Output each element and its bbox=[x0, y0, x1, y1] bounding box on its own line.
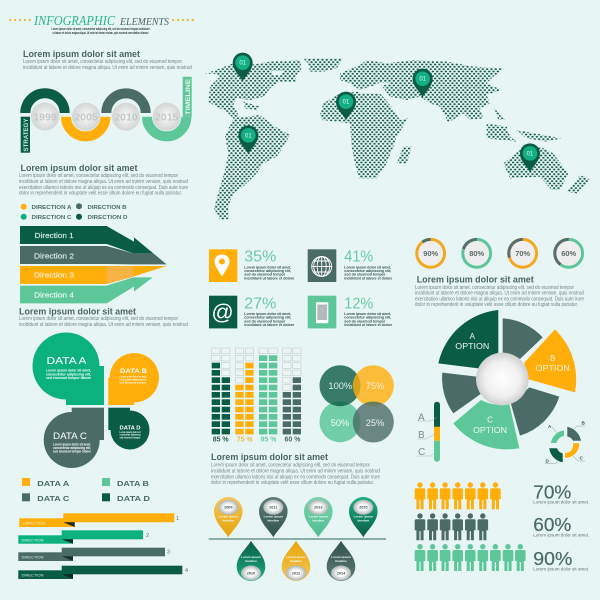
arrow chart: directions: Direction 2 bbox=[34, 251, 74, 260]
petal: data D: Lorem ipsum dolor sit bbox=[120, 431, 141, 434]
pin 2013: timeline bbox=[312, 518, 324, 522]
petal: data D: DATA D bbox=[120, 426, 141, 432]
pin 2015: Lorem ipsum bbox=[354, 514, 373, 518]
title bbox=[9, 14, 195, 35]
chart: mini donut: B bbox=[582, 420, 586, 426]
petal: data C: DATA C bbox=[53, 431, 88, 441]
text block: timeline intro: Lorem ipsum dolor sit amet, consectetur adipiscing elit, sed do eiusmod tempor bbox=[23, 59, 182, 65]
text block: options intro: exercitation ullamco laboris nisi ut aliquip ex ea commodo consequat. Duis aute irure bbox=[415, 296, 584, 302]
pictogram row: 70%: 70% bbox=[533, 481, 571, 502]
pin 2010 bbox=[237, 541, 265, 581]
text block: data intro: Lorem ipsum dolor sit amet, consectetur adipiscing elit, sed do eiusmod tempor bbox=[19, 316, 178, 322]
chart: ribbon bars bbox=[18, 513, 188, 579]
pin 2011 bbox=[259, 497, 288, 537]
chart: year timeline bbox=[21, 77, 192, 153]
ribbon bar 1: DIRECTION bbox=[23, 520, 45, 525]
stat: 35% location bbox=[209, 249, 294, 282]
text block: directions intro: dolor in reprehenderit in voluptate velit esse cillum dolore eu fugiat nulla pariatur. bbox=[19, 191, 182, 197]
petal: data B: sed eiusmod tempor bbox=[120, 380, 146, 384]
text block: timeline intro bbox=[23, 49, 192, 71]
chart: option wheel: OPTION bbox=[536, 364, 570, 373]
chart: year timeline: 2010 bbox=[114, 112, 138, 124]
stat: 27% at sign: consectetur adipiscing elit, bbox=[244, 316, 291, 320]
chart: cell bars bbox=[212, 348, 301, 444]
ribbon bar 4: DIRECTION bbox=[22, 572, 44, 578]
title: INFOGRAPHIC bbox=[33, 14, 116, 29]
text block: timeline intro: incididunt ut labore et dolore magna aliqua. Ut enim ad minim veniam, quis nostrud bbox=[23, 65, 192, 71]
pin 2012: timeline bbox=[290, 559, 302, 563]
ring 90%: 90% bbox=[423, 249, 439, 258]
pin: Africa: 01 bbox=[343, 100, 350, 106]
ribbon bar 3: 3 bbox=[167, 550, 170, 556]
bar group 75%: 75 % bbox=[237, 437, 253, 444]
chart: mini donut bbox=[545, 420, 586, 464]
text block: timeline pins intro: Lorem ipsum dolor sit amet, consectetur adipiscing elit, sed do eiusmod tempor bbox=[211, 463, 370, 469]
text block: timeline intro: Lorem ipsum dolor sit amet bbox=[23, 49, 140, 59]
petal: data C: sed eiusmod tempor labore bbox=[53, 450, 91, 454]
petal: data D: sed eiusmod tempor bbox=[120, 436, 141, 439]
stat: 35% location: Lorem ipsum dolor sit amet, bbox=[244, 265, 291, 269]
map: dotted world map bbox=[205, 53, 591, 220]
stat: 27% at sign: 27% bbox=[244, 295, 276, 312]
chart: A B C scale: C bbox=[418, 447, 425, 458]
petal: data C: Lorem ipsum dolor sit amet, bbox=[53, 442, 91, 446]
chart: venn circles: 50% bbox=[331, 418, 349, 428]
text block: directions intro: incididunt ut labore et dolore magna aliqua. Ut enim ad minim veniam, quis nostrud bbox=[19, 179, 188, 185]
title: ••••• bbox=[172, 18, 195, 24]
pin: Australia bbox=[520, 143, 540, 172]
text block: directions intro bbox=[19, 163, 188, 197]
chart: year timeline: 1999 bbox=[33, 112, 57, 124]
pin 2009: 2009 bbox=[224, 506, 233, 510]
pictogram row: 60%: Lorem ipsum dolor sit amet. bbox=[533, 532, 589, 538]
legend: directions: DIRECTION A bbox=[32, 205, 72, 211]
chart: venn circles: 75% bbox=[366, 381, 384, 391]
pin 2014: 2014 bbox=[337, 571, 346, 575]
ring 60% bbox=[549, 234, 588, 273]
pin: North America: 01 bbox=[239, 61, 247, 67]
chart: mini donut: A bbox=[548, 424, 552, 429]
stat: 12% phone: consectetur adipiscing elit, bbox=[344, 316, 391, 320]
pin: Asia: 01 bbox=[419, 77, 427, 83]
petal: data B: Lorem ipsum dolor sit amet bbox=[120, 374, 147, 378]
petal: data C bbox=[44, 408, 104, 468]
ribbon bar 3: DIRECTION bbox=[22, 554, 44, 560]
stat: 41% globe: consectetur adipiscing elit, bbox=[344, 269, 391, 273]
petal: data A: consectetur adipiscing elit, bbox=[46, 372, 91, 376]
petal: data D bbox=[108, 408, 150, 450]
pin 2011: 2011 bbox=[269, 506, 277, 510]
stat: 35% location: sed do eiusmod tempor bbox=[244, 273, 286, 277]
pin 2010: Lorem ipsum bbox=[241, 555, 261, 559]
legend: directions: DIRECTION D bbox=[88, 215, 128, 221]
arrow chart: directions: Direction 4 bbox=[34, 290, 74, 300]
ring 70%: 70% bbox=[515, 249, 531, 258]
pin 2015 bbox=[349, 497, 378, 537]
bar group 60%: 60 % bbox=[285, 437, 301, 444]
ring 60%: 60% bbox=[561, 249, 577, 258]
stat: 35% location: consectetur adipiscing elit, bbox=[244, 269, 291, 273]
legend: data: DATA A bbox=[37, 479, 70, 488]
title: ut labore et dolore magna aliqua. Ut enim ad minim veniam, quis nostrud exercitation ullamco bbox=[52, 31, 149, 35]
stat: 41% globe bbox=[308, 249, 392, 282]
chart: venn circles: 100% bbox=[328, 381, 352, 391]
pin: North America bbox=[233, 53, 253, 82]
chart: option wheel: B bbox=[550, 354, 555, 363]
text block: options intro: incididunt ut labore et dolore magna aliqua. Ut enim ad minim veniam, quis nostrud bbox=[415, 291, 584, 297]
text block: timeline pins intro: exercitation ullamco laboris nisi ut aliquip ex ea commodo consequat. Duis aute irure bbox=[211, 474, 380, 480]
text block: directions intro: Lorem ipsum dolor sit amet bbox=[20, 163, 138, 173]
text block: timeline pins intro: Lorem ipsum dolor sit amet bbox=[211, 452, 328, 462]
chart: progress rings bbox=[411, 234, 588, 273]
icon: at sign: @ bbox=[211, 300, 234, 324]
arrow chart: directions: Direction 3 bbox=[34, 270, 74, 280]
chart: option wheel: OPTION bbox=[455, 342, 490, 351]
title: Lorem ipsum dolor sit amet, consectetur adipiscing elit, sed do eiusmod tempor incididunt bbox=[52, 27, 150, 31]
ribbon bar 1 bbox=[19, 513, 179, 527]
chart: year timeline: TIMELINE bbox=[186, 79, 192, 115]
pin 2010: 2010 bbox=[247, 571, 255, 575]
petal: data A bbox=[32, 332, 104, 405]
bar group 85%: 85 % bbox=[213, 437, 229, 444]
petal: data B bbox=[108, 353, 159, 405]
stat: 27% at sign: incididunt ut labore et dolore bbox=[244, 323, 294, 327]
title: ••••• bbox=[9, 18, 32, 24]
legend: data bbox=[22, 478, 151, 503]
legend: data: DATA C bbox=[37, 494, 70, 503]
stat: 35% location: incididunt ut labore et dolore bbox=[244, 276, 294, 280]
chart: venn circles bbox=[320, 365, 394, 442]
title: ELEMENTS bbox=[119, 17, 170, 28]
stat: 41% globe: 41% bbox=[344, 249, 373, 266]
text block: data intro bbox=[19, 306, 188, 328]
stat: 12% phone: incididunt ut labore et dolore bbox=[344, 323, 392, 327]
ribbon bar 2 bbox=[18, 530, 149, 544]
ribbon bar 3 bbox=[18, 548, 170, 561]
pictogram row: 90%: Lorem ipsum dolor sit amet. bbox=[533, 566, 589, 571]
pictogram row: 60%: 60% bbox=[533, 514, 571, 535]
ribbon bar 1: 1 bbox=[176, 516, 179, 522]
pictogram row: 90% bbox=[415, 544, 589, 571]
stat: 27% at sign: Lorem ipsum dolor sit amet, bbox=[244, 312, 291, 316]
bar group 95%: 95 % bbox=[261, 437, 277, 444]
legend: directions: DIRECTION C bbox=[32, 215, 72, 221]
legend: directions: DIRECTION B bbox=[88, 205, 126, 211]
stat: 12% phone: sed do eiusmod tempor bbox=[344, 319, 386, 323]
pin: Africa bbox=[336, 92, 356, 121]
pin 2015: timeline bbox=[357, 518, 369, 522]
pin: South America: 01 bbox=[245, 133, 252, 139]
chart: mini donut: C bbox=[580, 456, 584, 460]
pin 2010: timeline bbox=[245, 559, 257, 563]
pin 2013 bbox=[304, 497, 333, 537]
ribbon bar 2: DIRECTION bbox=[22, 537, 44, 542]
pin 2013: Lorem ipsum bbox=[309, 514, 328, 518]
pin 2011: Lorem ipsum bbox=[264, 514, 283, 518]
pin 2014: Lorem ipsum bbox=[331, 555, 351, 559]
ring 70% bbox=[505, 236, 540, 271]
chart: A B C scale: A bbox=[418, 413, 425, 424]
pin 2014: timeline bbox=[335, 559, 347, 563]
icon: globe bbox=[312, 256, 332, 276]
text block: data intro: Lorem ipsum dolor sit amet bbox=[19, 306, 136, 316]
stat: 27% at sign bbox=[209, 295, 294, 328]
petal: data A: DATA A bbox=[46, 355, 86, 367]
chart: option wheel: A bbox=[470, 332, 476, 341]
chart: mini donut: D bbox=[546, 458, 550, 464]
text block: options intro bbox=[415, 275, 584, 308]
icon: phone bbox=[316, 302, 328, 323]
ribbon bar 4 bbox=[18, 566, 188, 579]
petal: data B: DATA B bbox=[120, 368, 148, 375]
chart: A B C scale: B bbox=[418, 430, 425, 441]
pin 2011: timeline bbox=[267, 518, 279, 522]
pictogram row: 60% bbox=[415, 513, 589, 540]
pin 2015: 2015 bbox=[359, 506, 368, 510]
pin 2012 bbox=[282, 541, 310, 581]
ring 80% bbox=[459, 236, 494, 271]
ring 90% bbox=[411, 234, 450, 273]
petal: data A: sed eiusmod tempor labore bbox=[46, 376, 91, 380]
chart: year timeline: STRATEGY bbox=[24, 118, 30, 152]
text block: options intro: dolor in reprehenderit in voluptate velit esse cillum dolore eu fugiat nulla pariatur. bbox=[415, 302, 578, 308]
chart: pin timeline bbox=[209, 497, 386, 581]
pin 2009 bbox=[214, 497, 243, 537]
pictogram row: 70% bbox=[415, 481, 589, 509]
text block: timeline pins intro: dolor in reprehenderit in voluptate velit esse cillum dolore eu fugiat nulla pariatur. bbox=[211, 480, 374, 486]
chart: option wheel: C bbox=[487, 416, 493, 424]
pictogram row: 90%: 90% bbox=[533, 548, 572, 569]
arrow chart: directions: Direction 1 bbox=[35, 231, 74, 240]
petal: data B: consectetur adipiscing elit bbox=[120, 378, 147, 382]
text block: directions intro: Lorem ipsum dolor sit amet, consectetur adipiscing elit, sed do eiusmod tempor bbox=[19, 173, 178, 179]
pin 2013: 2013 bbox=[314, 506, 323, 510]
pin: Australia: 01 bbox=[527, 151, 534, 157]
text block: timeline pins intro: incididunt ut labore et dolore magna aliqua. Ut enim ad minim veniam, quis nostrud bbox=[211, 468, 380, 474]
diagram: data petals bbox=[32, 332, 159, 468]
text block: options intro: Lorem ipsum dolor sit amet bbox=[417, 275, 534, 285]
pin 2009: timeline bbox=[222, 518, 234, 522]
pin: South America bbox=[238, 125, 258, 154]
chart: year timeline: 2015 bbox=[155, 112, 179, 124]
chart: year timeline: 2005 bbox=[74, 112, 98, 124]
text block: directions intro: exercitation ullamco laboris nisi ut aliquip ex ea commodo consequat. Duis aute irure bbox=[19, 185, 188, 191]
stat: 12% phone: Lorem ipsum dolor sit amet, bbox=[344, 312, 391, 316]
legend: data: DATA B bbox=[117, 479, 150, 488]
pin 2012: Lorem ipsum bbox=[286, 555, 306, 559]
stat: 41% globe: incididunt ut labore et dolore bbox=[344, 276, 392, 280]
pin 2014 bbox=[327, 541, 355, 581]
stat: 12% phone bbox=[308, 295, 392, 328]
chart: venn circles: 25% bbox=[366, 418, 384, 428]
text block: timeline pins intro bbox=[211, 452, 380, 486]
stat: 35% location: 35% bbox=[244, 249, 276, 266]
petal: data C: consectetur adipiscing elit, bbox=[53, 446, 91, 450]
arrow chart: directions bbox=[20, 226, 167, 303]
stat: 12% phone: 12% bbox=[344, 295, 373, 312]
pin: Asia bbox=[413, 69, 433, 98]
petal: data A: Lorem ipsum dolor sit amet, bbox=[46, 368, 91, 372]
text block: data intro: incididunt ut labore et dolore magna aliqua. Ut enim ad minim veniam, quis nostrud bbox=[19, 322, 188, 328]
ribbon bar 2: 2 bbox=[146, 533, 149, 539]
pictogram row: 70%: Lorem ipsum dolor sit amet. bbox=[533, 500, 589, 504]
ring 80%: 80% bbox=[469, 249, 485, 258]
chart: A B C scale bbox=[417, 402, 440, 462]
chart: option wheel: OPTION bbox=[473, 426, 507, 435]
stat: 41% globe: sed do eiusmod tempor bbox=[344, 273, 386, 277]
stat: 27% at sign: sed do eiusmod tempor bbox=[244, 319, 286, 323]
stat: 41% globe: Lorem ipsum dolor sit amet, bbox=[344, 265, 391, 269]
pin 2009: Lorem ipsum bbox=[219, 514, 238, 518]
text block: options intro: Lorem ipsum dolor sit amet, consectetur adipiscing elit, sed do eiusmod tempor bbox=[415, 285, 574, 291]
legend: directions bbox=[21, 203, 128, 221]
legend: data: DATA D bbox=[117, 494, 151, 503]
petal: data D: consectetur adipiscing bbox=[120, 434, 141, 437]
chart: option wheel bbox=[438, 310, 576, 449]
ribbon bar 4: 4 bbox=[185, 568, 188, 574]
pin 2012: 2012 bbox=[292, 571, 300, 575]
icon: map pin bbox=[214, 254, 230, 276]
